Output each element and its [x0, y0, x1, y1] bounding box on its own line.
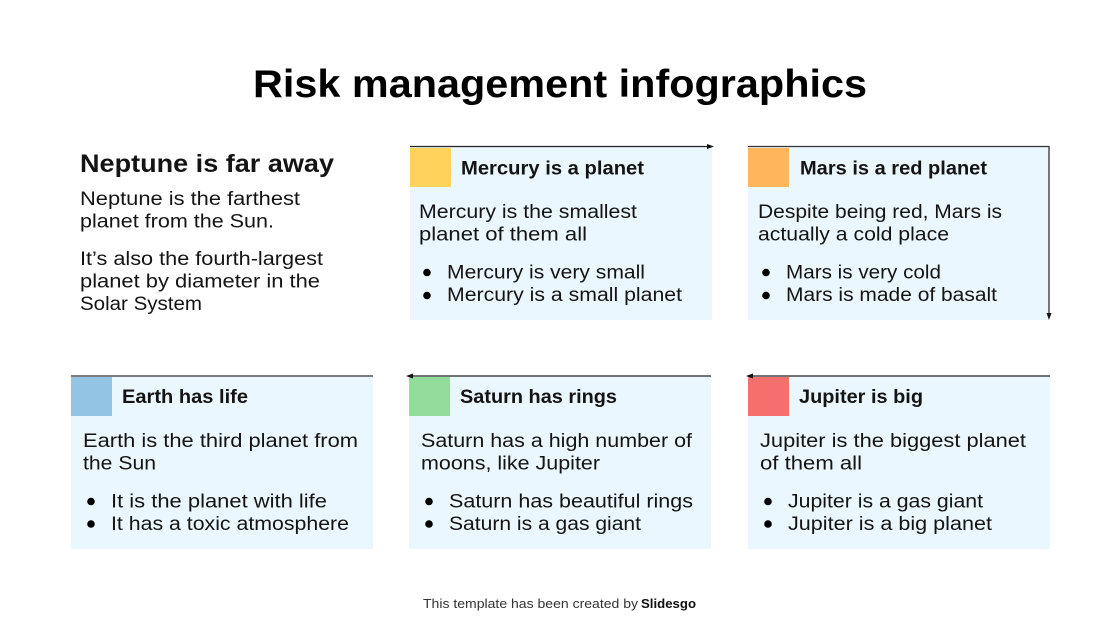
panel: Mercury [410, 147, 712, 320]
list: Earth bullets: It has a toxic atmosphere [111, 514, 349, 535]
heading: Mars is a red planet: Mars is a red planet [800, 158, 988, 180]
text: Mercury description: Mercury is the smallest [419, 202, 638, 223]
text: Jupiter description [760, 431, 1027, 474]
list: Jupiter bullets [764, 492, 993, 535]
text: Earth description: Earth is the third planet from [83, 431, 358, 452]
icon: blue square [71, 377, 112, 416]
list: Jupiter bullets: Jupiter is a big planet [788, 514, 993, 535]
icon: red square [748, 377, 789, 416]
paragraph: Neptune description: planet from the Sun. [80, 212, 274, 232]
footer credit: Slidesgo [641, 597, 696, 611]
heading: Neptune is far away: Neptune is far away [80, 150, 334, 178]
list: Mercury bullets: Mercury is very small [447, 262, 645, 284]
text: Saturn description: Saturn has a high number of [421, 431, 693, 452]
paragraph: Neptune description: planet by diameter in the [80, 272, 320, 292]
text: Jupiter description: of them all [760, 454, 862, 474]
list: Mars bullets [762, 262, 998, 306]
heading: Earth has life: Earth has life [122, 386, 248, 408]
list: Saturn bullets: Saturn is a gas giant [449, 514, 642, 535]
paragraph: Neptune description: It’s also the fourth-largest [80, 249, 324, 270]
list: Saturn bullets: Saturn has beautiful rings [449, 492, 693, 512]
panel: Mars [748, 147, 1049, 320]
text: Mars description: Despite being red, Mars is [758, 202, 1002, 223]
list: Mercury bullets [423, 262, 683, 306]
panel: Jupiter [748, 376, 1050, 549]
arrow: Mercury to Mars [410, 144, 714, 149]
text: Saturn description: moons, like Jupiter [421, 454, 601, 474]
text block: Neptune intro [80, 150, 334, 315]
title: Risk management infographics [253, 63, 867, 106]
line: Earth top border [71, 375, 373, 377]
text: Earth description [83, 431, 358, 474]
list: Earth bullets: It is the planet with life [111, 492, 327, 512]
heading: Jupiter is big: Jupiter is big [799, 386, 923, 408]
heading: Saturn has rings: Saturn has rings [460, 386, 617, 408]
list: Mars bullets: Mars is very cold [786, 262, 941, 284]
list: Mercury bullets: Mercury is a small planet [447, 285, 683, 306]
text: Jupiter description: Jupiter is the biggest planet [760, 431, 1027, 452]
list: Jupiter bullets: Jupiter is a gas giant [788, 492, 984, 512]
paragraph: Neptune description: Solar System [80, 294, 202, 315]
text: Mercury description: planet of them all [419, 224, 587, 246]
icon: green square [409, 377, 450, 416]
arrow: Mars to Jupiter [748, 146, 1052, 320]
paragraph: Neptune description [80, 189, 324, 315]
list: Earth bullets [87, 492, 349, 535]
panel: Saturn [409, 376, 711, 549]
paragraph: Neptune description: Neptune is the farthest [80, 189, 301, 210]
text: Mars description [758, 202, 1002, 246]
text: Mercury description [419, 202, 638, 246]
text: Mars description: actually a cold place [758, 224, 949, 246]
icon: orange square [748, 148, 789, 187]
arrow: Jupiter to Saturn [746, 374, 1050, 378]
heading: Mercury is a planet: Mercury is a planet [461, 158, 645, 180]
list: Mars bullets: Mars is made of basalt [786, 285, 998, 306]
arrow: Saturn to Earth [406, 374, 711, 378]
footer credit: This template has been created by [423, 597, 639, 611]
text: Earth description: the Sun [83, 454, 156, 474]
panel: Earth [71, 376, 373, 549]
text: Saturn description [421, 431, 693, 474]
icon: yellow square [410, 148, 451, 187]
list: Saturn bullets [425, 492, 693, 535]
